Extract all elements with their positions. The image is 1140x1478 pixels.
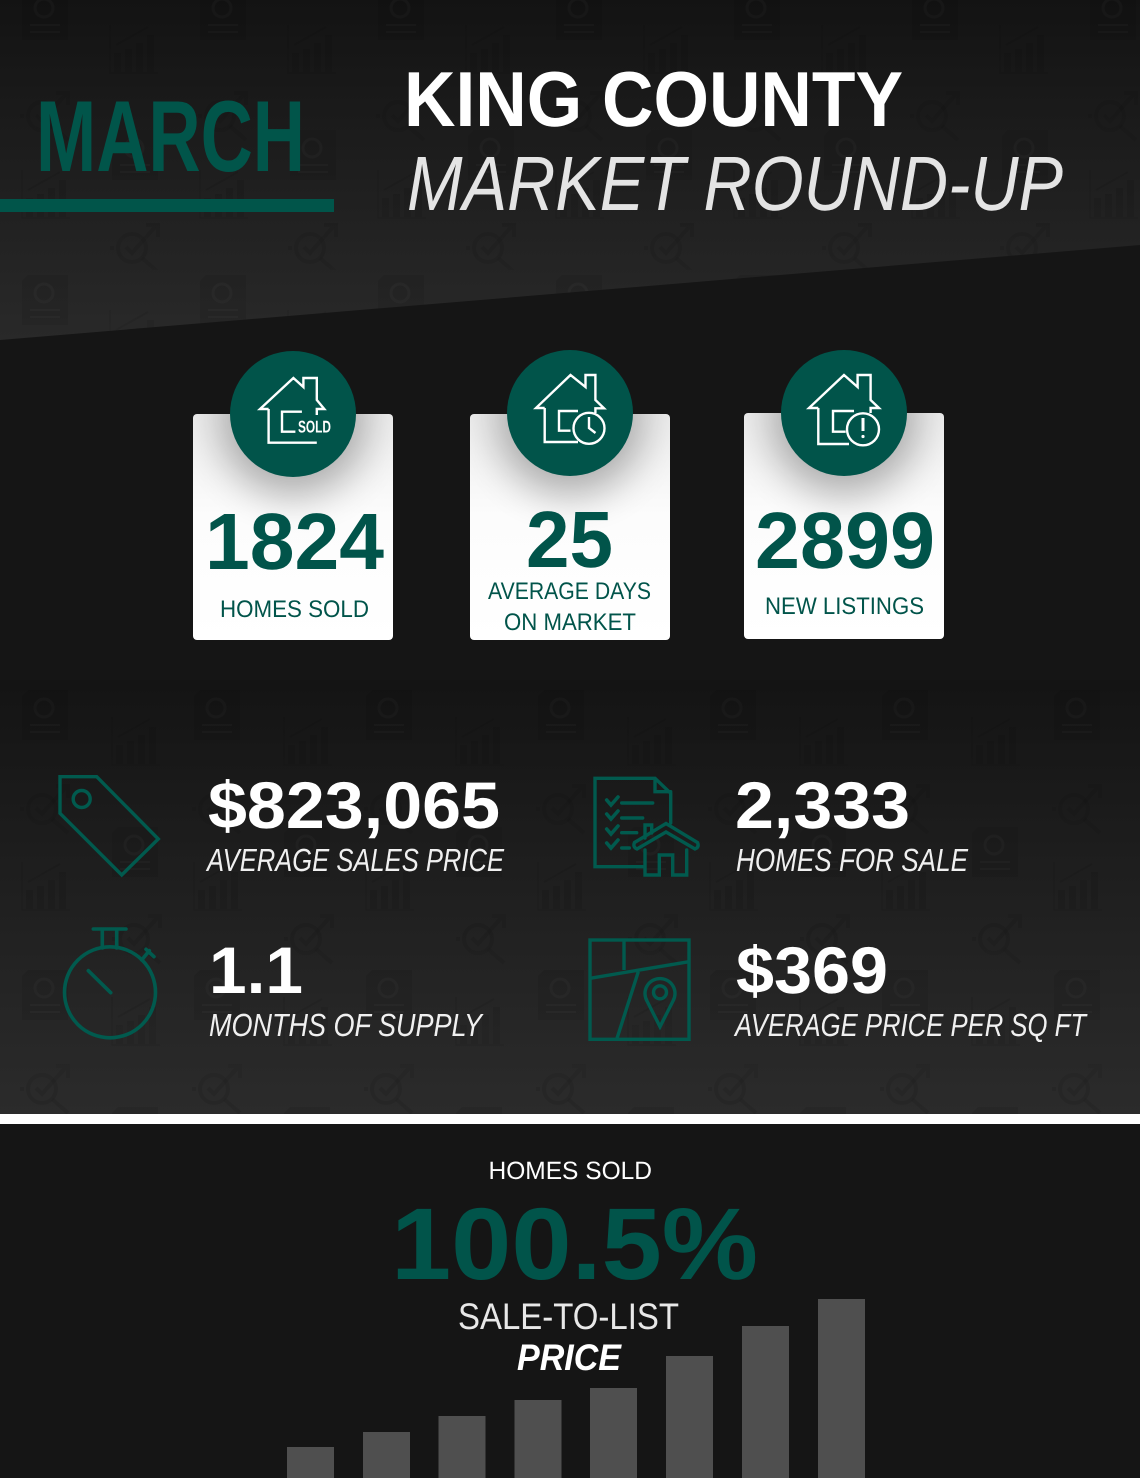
panel: new listings card: 2899 bbox=[755, 496, 935, 585]
panel: average days on market card bbox=[470, 350, 670, 640]
panel: new listings card: NEW LISTINGS bbox=[765, 593, 924, 620]
sale-to-list text block: SALE-TO-LIST bbox=[458, 1296, 679, 1337]
title bbox=[404, 55, 1063, 227]
stat: homes for sale: HOMES FOR SALE bbox=[736, 842, 969, 878]
stat: average sales price: AVERAGE SALES PRICE bbox=[205, 842, 505, 878]
stat: average price per sq ft bbox=[590, 933, 1088, 1043]
icon: map with pin bbox=[590, 940, 689, 1039]
header background panel bbox=[0, 138, 1140, 340]
icon: house with clock bbox=[536, 375, 604, 444]
icon: house sold bbox=[260, 378, 331, 443]
icon: price tag bbox=[60, 777, 158, 875]
bar chart bbox=[287, 1299, 865, 1478]
sale-to-list text block: HOMES SOLD bbox=[488, 1157, 652, 1185]
panel: average days on market card: 25 bbox=[526, 495, 613, 584]
stat: average sales price: $823,065 bbox=[208, 768, 500, 842]
panel: homes sold card: 1824 bbox=[205, 497, 385, 586]
sale-to-list text block: PRICE bbox=[517, 1337, 622, 1378]
stat: months of supply bbox=[64, 929, 484, 1043]
stat: average price per sq ft: $369 bbox=[736, 933, 888, 1007]
heading: month bbox=[0, 81, 334, 212]
icon: checklist with house bbox=[595, 778, 698, 875]
stat: homes for sale bbox=[595, 768, 969, 878]
panel: homes sold card: HOMES SOLD bbox=[220, 596, 369, 623]
stat: months of supply: MONTHS OF SUPPLY bbox=[209, 1007, 484, 1043]
title: KING COUNTY bbox=[404, 55, 903, 143]
sale-to-list text block bbox=[391, 1157, 758, 1378]
icon: house sold: SOLD bbox=[298, 418, 331, 437]
sale-to-list text block: 100.5% bbox=[391, 1187, 758, 1301]
stat: average sales price bbox=[60, 768, 505, 878]
white divider band bbox=[0, 1114, 1140, 1124]
panel: average days on market card: AVERAGE DAYS bbox=[488, 578, 651, 605]
stat: months of supply: 1.1 bbox=[209, 933, 303, 1007]
stat: homes for sale: 2,333 bbox=[735, 768, 910, 842]
panel: new listings card bbox=[744, 350, 944, 639]
panel: average days on market card: ON MARKET bbox=[504, 609, 636, 636]
icon: stopwatch bbox=[64, 929, 156, 1038]
stats background panel bbox=[0, 680, 1140, 1114]
heading: month: MARCH bbox=[36, 81, 305, 193]
panel: homes sold card bbox=[193, 351, 393, 640]
icon: house with alert bbox=[809, 375, 879, 445]
